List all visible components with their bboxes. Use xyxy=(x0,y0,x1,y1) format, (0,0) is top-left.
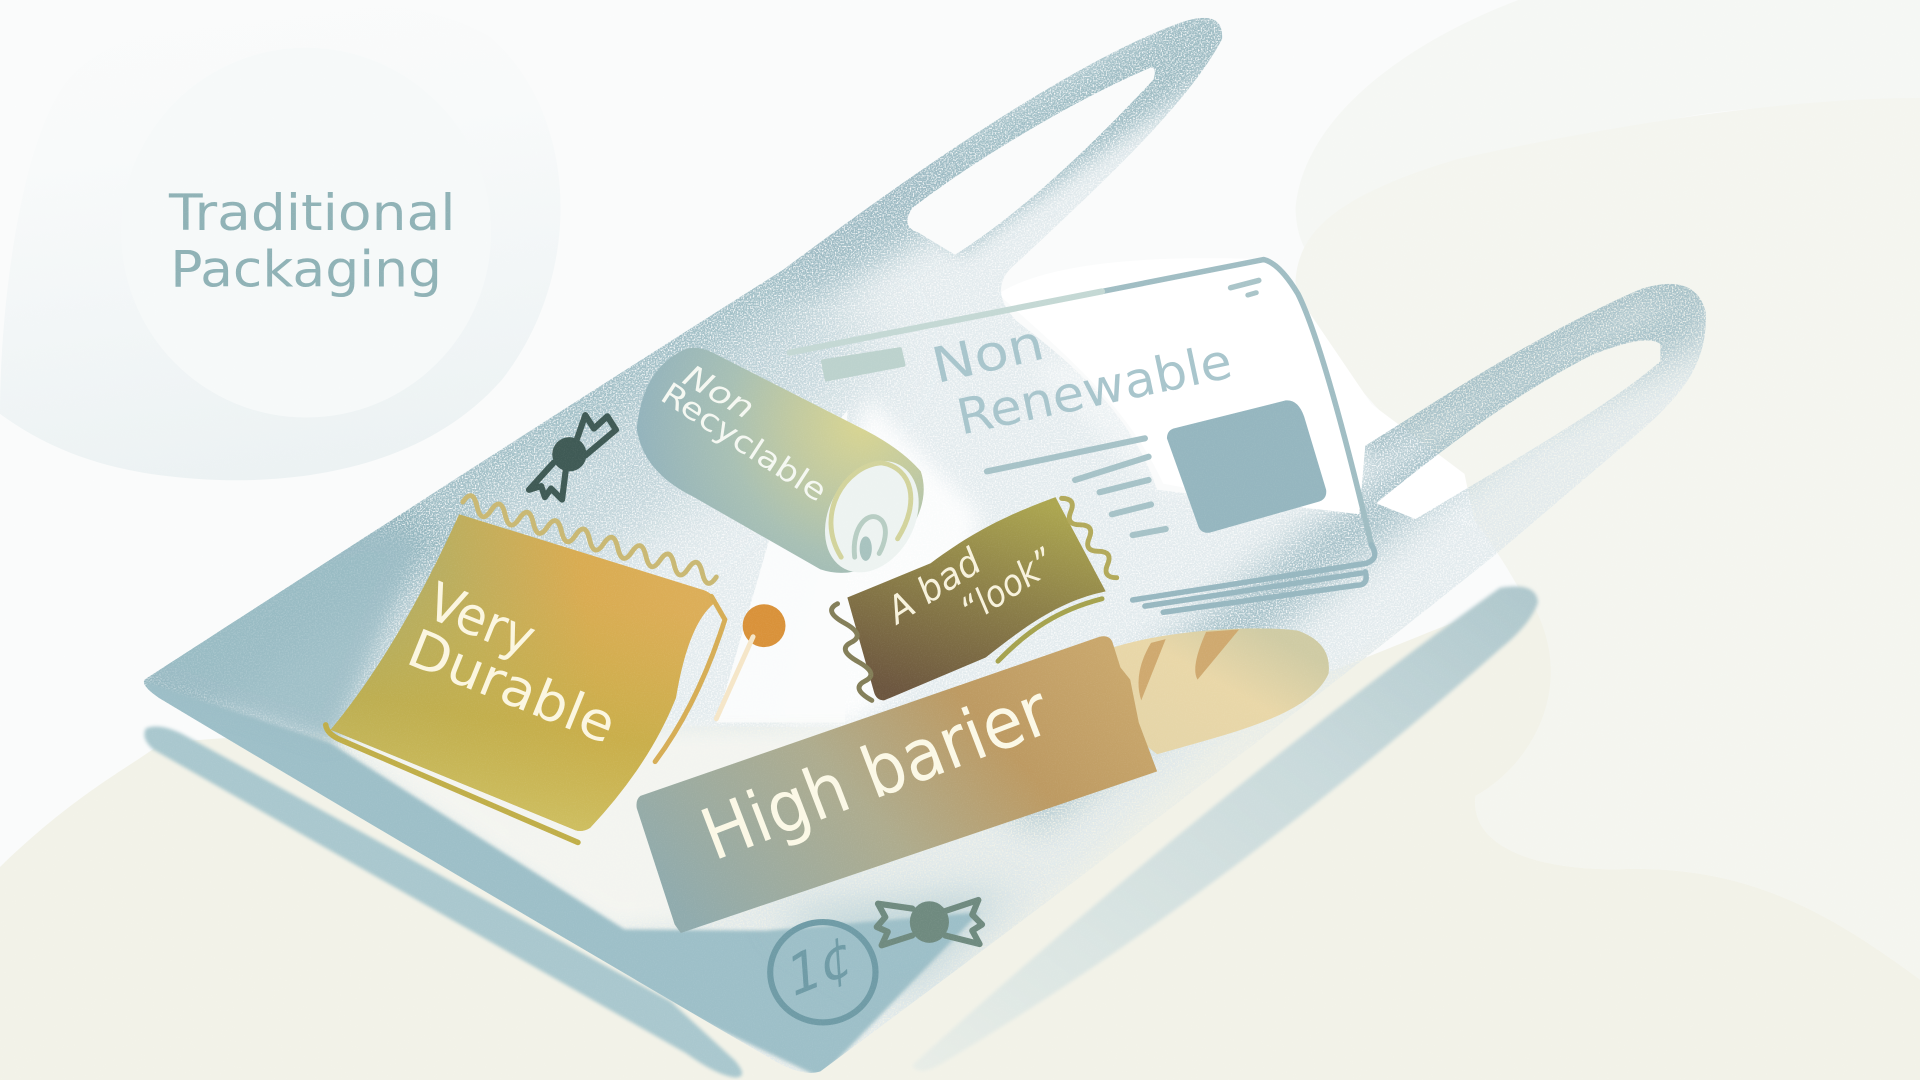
roll text xyxy=(654,359,833,509)
title: Packaging xyxy=(170,240,442,299)
newspaper text: Renewable xyxy=(952,333,1237,446)
chocolate bar text: High barier xyxy=(690,668,1061,877)
icon: lollipop xyxy=(716,604,786,719)
title: Traditional xyxy=(168,183,456,242)
snack bag text xyxy=(399,571,624,756)
roll: Non Recyclable xyxy=(637,348,937,589)
baguette xyxy=(1108,628,1329,754)
bag lower band xyxy=(146,681,980,1078)
decorative backdrop crescent xyxy=(0,2,561,480)
newspaper text: Non xyxy=(927,314,1049,395)
candy bar text xyxy=(877,539,1063,633)
newspaper: Non Renewable xyxy=(790,260,1375,612)
roll text: Non xyxy=(677,359,760,427)
icon: green candy xyxy=(877,900,982,945)
candy bar: A bad look xyxy=(832,497,1117,700)
snack bag text: Very xyxy=(419,571,544,669)
right bag strip xyxy=(912,586,1538,1071)
candy bar text: “look” xyxy=(953,539,1063,632)
icon: dark candy xyxy=(529,415,616,500)
title xyxy=(168,183,456,299)
decorative circle panel xyxy=(121,48,491,418)
icon: one cent coin: 1¢ xyxy=(786,921,854,1012)
icon: one cent coin xyxy=(770,921,876,1022)
roll text: Recyclable xyxy=(654,377,833,509)
chocolate bar: High barier xyxy=(636,636,1157,933)
snack bag: Very Durable xyxy=(326,496,725,842)
snack bag text: Durable xyxy=(399,618,624,756)
candy bar text: A bad xyxy=(877,540,989,633)
lower bag strip xyxy=(144,727,742,1078)
